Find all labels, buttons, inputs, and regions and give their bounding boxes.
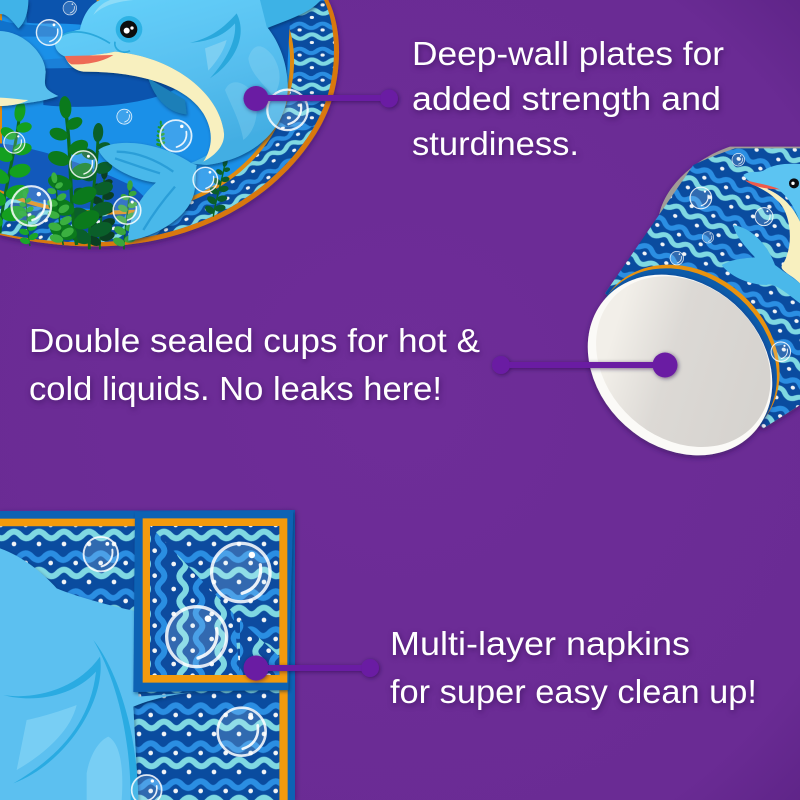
text: cups: Double sealed cups for hot & (29, 322, 480, 359)
cup base disc (551, 237, 800, 493)
main dolphin (55, 0, 321, 241)
top fin (258, 0, 321, 28)
tail (98, 143, 197, 241)
cup blue band (556, 231, 800, 486)
back napkin pattern (0, 526, 279, 800)
plate wave border (0, 0, 334, 242)
cup body with waves (605, 148, 800, 428)
text: cups (29, 322, 480, 407)
text: plates (412, 35, 724, 162)
small dolphin (0, 0, 58, 106)
text: cups: cold liquids. No leaks here! (29, 370, 442, 407)
seaweed (0, 94, 237, 251)
small cup dolphin (722, 164, 800, 303)
back napkin orange trim (0, 519, 288, 800)
callout line: plates (244, 86, 398, 111)
napkin dolphin print (0, 548, 220, 800)
text: napkins: Multi-layer napkins (390, 625, 690, 662)
text: plates: Deep-wall plates for (412, 35, 724, 72)
plate wave border, lower curve (0, 126, 314, 242)
cup bubbles (670, 153, 791, 361)
text: napkins: for super easy clean up! (390, 673, 757, 710)
flipper (148, 78, 187, 114)
callout line: napkins (244, 656, 379, 680)
plate centre scene (0, 0, 292, 213)
plate with dolphin artwork (0, 0, 339, 260)
callout line: cups (492, 352, 678, 378)
napkin bubbles (84, 537, 270, 800)
text: napkins (390, 625, 757, 710)
text: plates: added strength and (412, 80, 721, 117)
cup rim (605, 147, 800, 428)
cup (551, 147, 800, 493)
plate bubbles (4, 1, 308, 226)
cup orange band (558, 227, 800, 483)
eye (116, 16, 142, 43)
dark water shapes (0, 0, 290, 210)
napkins (0, 510, 295, 800)
back napkin (0, 510, 295, 800)
plate rim (0, 0, 339, 246)
body highlights (93, 0, 133, 15)
mouth (65, 55, 113, 64)
text: plates: sturdiness. (412, 125, 579, 162)
body (55, 0, 288, 165)
front folded napkin (133, 510, 293, 692)
belly (65, 52, 224, 162)
